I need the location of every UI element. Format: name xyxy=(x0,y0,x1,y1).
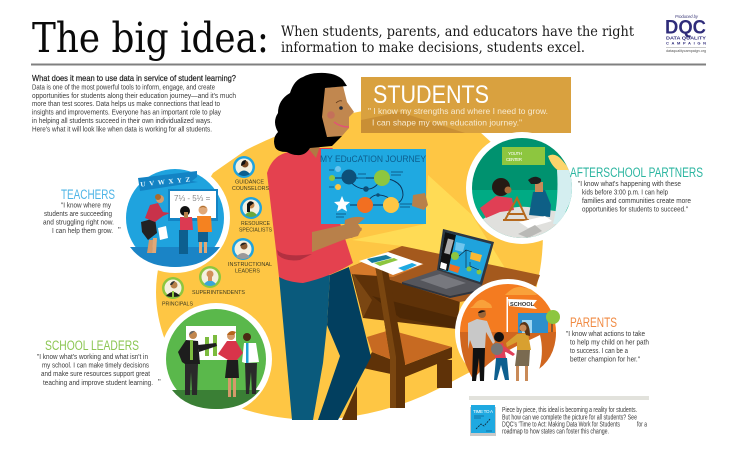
paper on desk xyxy=(359,252,423,275)
callout text: But how can we complete the picture for all students? See xyxy=(502,412,637,422)
teachers quote: students are succeeding xyxy=(44,209,112,218)
school leaders quote: and make sure resources support great xyxy=(41,369,151,378)
school leaders quote xyxy=(37,352,161,387)
panel: students xyxy=(361,77,571,133)
laptop xyxy=(402,229,494,298)
circle: parents: SCHOOL xyxy=(510,302,534,308)
report thumbnail: TIME TO A xyxy=(473,409,493,414)
teachers quote: and struggling right now. xyxy=(43,218,114,226)
chair xyxy=(342,265,452,420)
logo: Data Quality Campaign: DATA QUALITY xyxy=(666,36,706,40)
callout text: roadmap to how states can foster this change. xyxy=(502,426,609,436)
subtitle xyxy=(281,24,634,56)
shirt xyxy=(267,148,353,283)
teachers quote: " xyxy=(118,225,121,234)
icon: resource specialists: RESOURCE xyxy=(241,221,270,227)
school leaders quote: my school. I can make timely decisions xyxy=(42,360,149,370)
parents quote: better champion for her." xyxy=(570,354,640,364)
parents quote: to success. I can be a xyxy=(570,346,629,355)
subtitle: information to make decisions, students excel. xyxy=(281,40,585,56)
logo: Data Quality Campaign: DQC xyxy=(665,18,706,38)
parents heading: PARENTS xyxy=(570,315,617,330)
parents quote: "I know what actions to take xyxy=(566,329,645,338)
icon: guidance counselors xyxy=(232,156,269,192)
logo: Data Quality Campaign: Produced by xyxy=(675,14,699,19)
circle: afterschool partners: CENTER xyxy=(506,157,523,162)
student figure xyxy=(267,73,371,420)
students quote xyxy=(368,106,548,128)
circle: teachers: U V W X Y Z xyxy=(140,176,191,189)
school leaders quote: " xyxy=(158,377,161,386)
icon: superintendents xyxy=(192,266,245,296)
icon: instructional leaders: LEADERS xyxy=(235,268,260,274)
jeans xyxy=(279,267,371,420)
teachers heading: TEACHERS xyxy=(61,187,115,202)
intro text block: Data is one of the most powerful tools to inform, engage, and create xyxy=(32,82,215,92)
icon: principals: PRINCIPALS xyxy=(162,302,193,308)
face xyxy=(318,86,354,137)
teachers quote xyxy=(43,200,121,235)
icon: instructional leaders: INSTRUCTIONAL xyxy=(228,262,273,268)
hair xyxy=(274,73,347,155)
subtitle: When students, parents, and educators have the right xyxy=(281,24,634,40)
desk xyxy=(350,246,540,329)
circle: afterschool partners xyxy=(466,132,578,244)
callout text xyxy=(502,405,648,436)
parents quote xyxy=(566,329,649,364)
title: The big idea: xyxy=(32,14,269,62)
icon: superintendents: SUPERINTENDENTS xyxy=(192,290,245,296)
light beam xyxy=(352,175,505,268)
hands xyxy=(343,193,428,238)
board: my education journey xyxy=(320,149,426,224)
school leaders quote: "I know what's working and what isn't in xyxy=(37,352,148,361)
callout text: Piece by piece, this ideal is becoming a reality for students. xyxy=(502,405,637,414)
circle: teachers xyxy=(120,163,230,273)
forearm xyxy=(312,224,362,252)
intro text block: What does it mean to use data in service of student learning? xyxy=(32,74,236,83)
logo: Data Quality Campaign xyxy=(665,14,706,53)
icon: principals xyxy=(162,277,193,308)
school leaders heading: SCHOOL LEADERS xyxy=(45,338,139,353)
intro text block: more than test scores. Data helps us make connections that lead to xyxy=(32,99,220,108)
logo: Data Quality Campaign: CAMPAIGN xyxy=(666,40,706,46)
icon: instructional leaders xyxy=(228,238,273,274)
afterschool quote: opportunities for students to succeed." xyxy=(582,204,688,214)
students quote: I can shape my own education journey." xyxy=(372,118,522,128)
parents quote: to help my child on her path xyxy=(570,338,649,346)
school leaders quote: teaching and improve student learning. xyxy=(43,378,153,387)
logo: Data Quality Campaign: dataqualitycampaign.org xyxy=(666,49,706,53)
board: my education journey: MY EDuCATION JOURNEY xyxy=(320,154,426,164)
intro text block: in helping all students succeed in their own individualized ways. xyxy=(32,116,212,125)
circle: school leaders xyxy=(160,303,272,415)
intro text block xyxy=(32,74,236,134)
callout text: for a xyxy=(637,420,648,428)
icon: guidance counselors: COUNSELORS xyxy=(232,186,269,192)
facial features xyxy=(327,101,349,127)
students quote: " I know my strengths and where I need to grow. xyxy=(368,106,548,116)
intro text block: insights and improvements. Everyone has an important role to play xyxy=(32,108,221,116)
circle: parents xyxy=(455,279,561,385)
heading: students: STUDENTS xyxy=(373,81,489,109)
yellow background shape xyxy=(156,110,543,420)
intro text block: opportunities for students along their education journey—and it's much xyxy=(32,91,236,100)
afterschool quote: "I know what's happening with these xyxy=(578,179,681,188)
afterschool quote: kids before 3:00 p.m. I can help xyxy=(582,188,668,196)
callout text: DQC's 'Time to Act: Making Data Work for Students xyxy=(502,420,620,428)
icon: resource specialists xyxy=(239,197,272,234)
intro text block: Here's what it will look like when data is working for all students. xyxy=(32,124,212,134)
circle: afterschool partners: YOUTH xyxy=(508,151,522,156)
teachers quote: "I know where my xyxy=(61,200,111,210)
afterschool quote: families and communities create more xyxy=(582,196,691,205)
afterschool quote xyxy=(578,179,691,214)
neck xyxy=(308,146,320,158)
teachers quote: I can help them grow. xyxy=(52,226,113,235)
icon: guidance counselors: GUIDANCE xyxy=(235,180,264,186)
icon: resource specialists: SPECIALISTS xyxy=(239,228,272,234)
report thumbnail xyxy=(470,405,496,436)
circle: teachers: 7⅓ - 5⅓ = xyxy=(174,194,211,203)
